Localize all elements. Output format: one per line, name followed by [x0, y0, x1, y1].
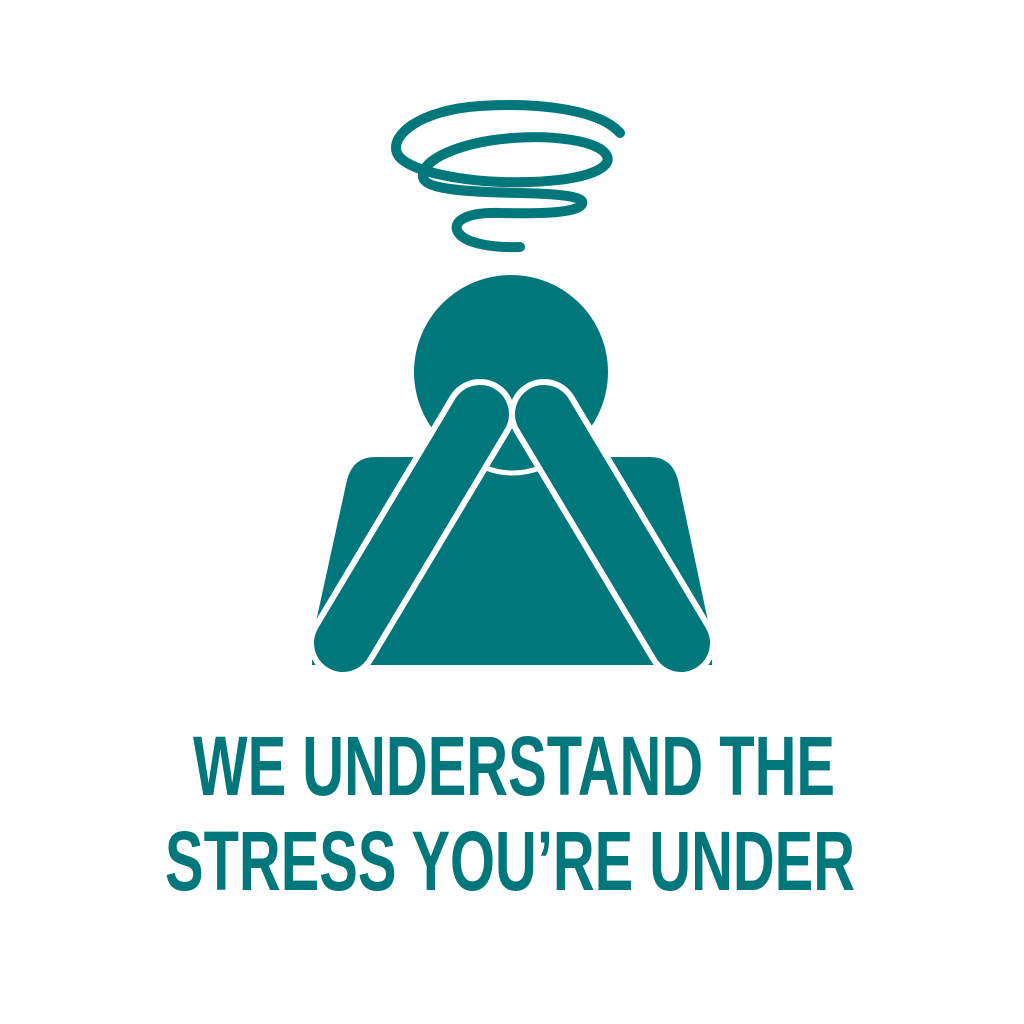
icon: stressed person covering face [312, 275, 712, 665]
body [312, 457, 712, 665]
title [165, 719, 855, 908]
head [414, 275, 608, 469]
left arm [343, 414, 480, 643]
icon: dizzy spiral [396, 105, 620, 247]
right arm [544, 414, 681, 643]
neck line [486, 468, 540, 473]
